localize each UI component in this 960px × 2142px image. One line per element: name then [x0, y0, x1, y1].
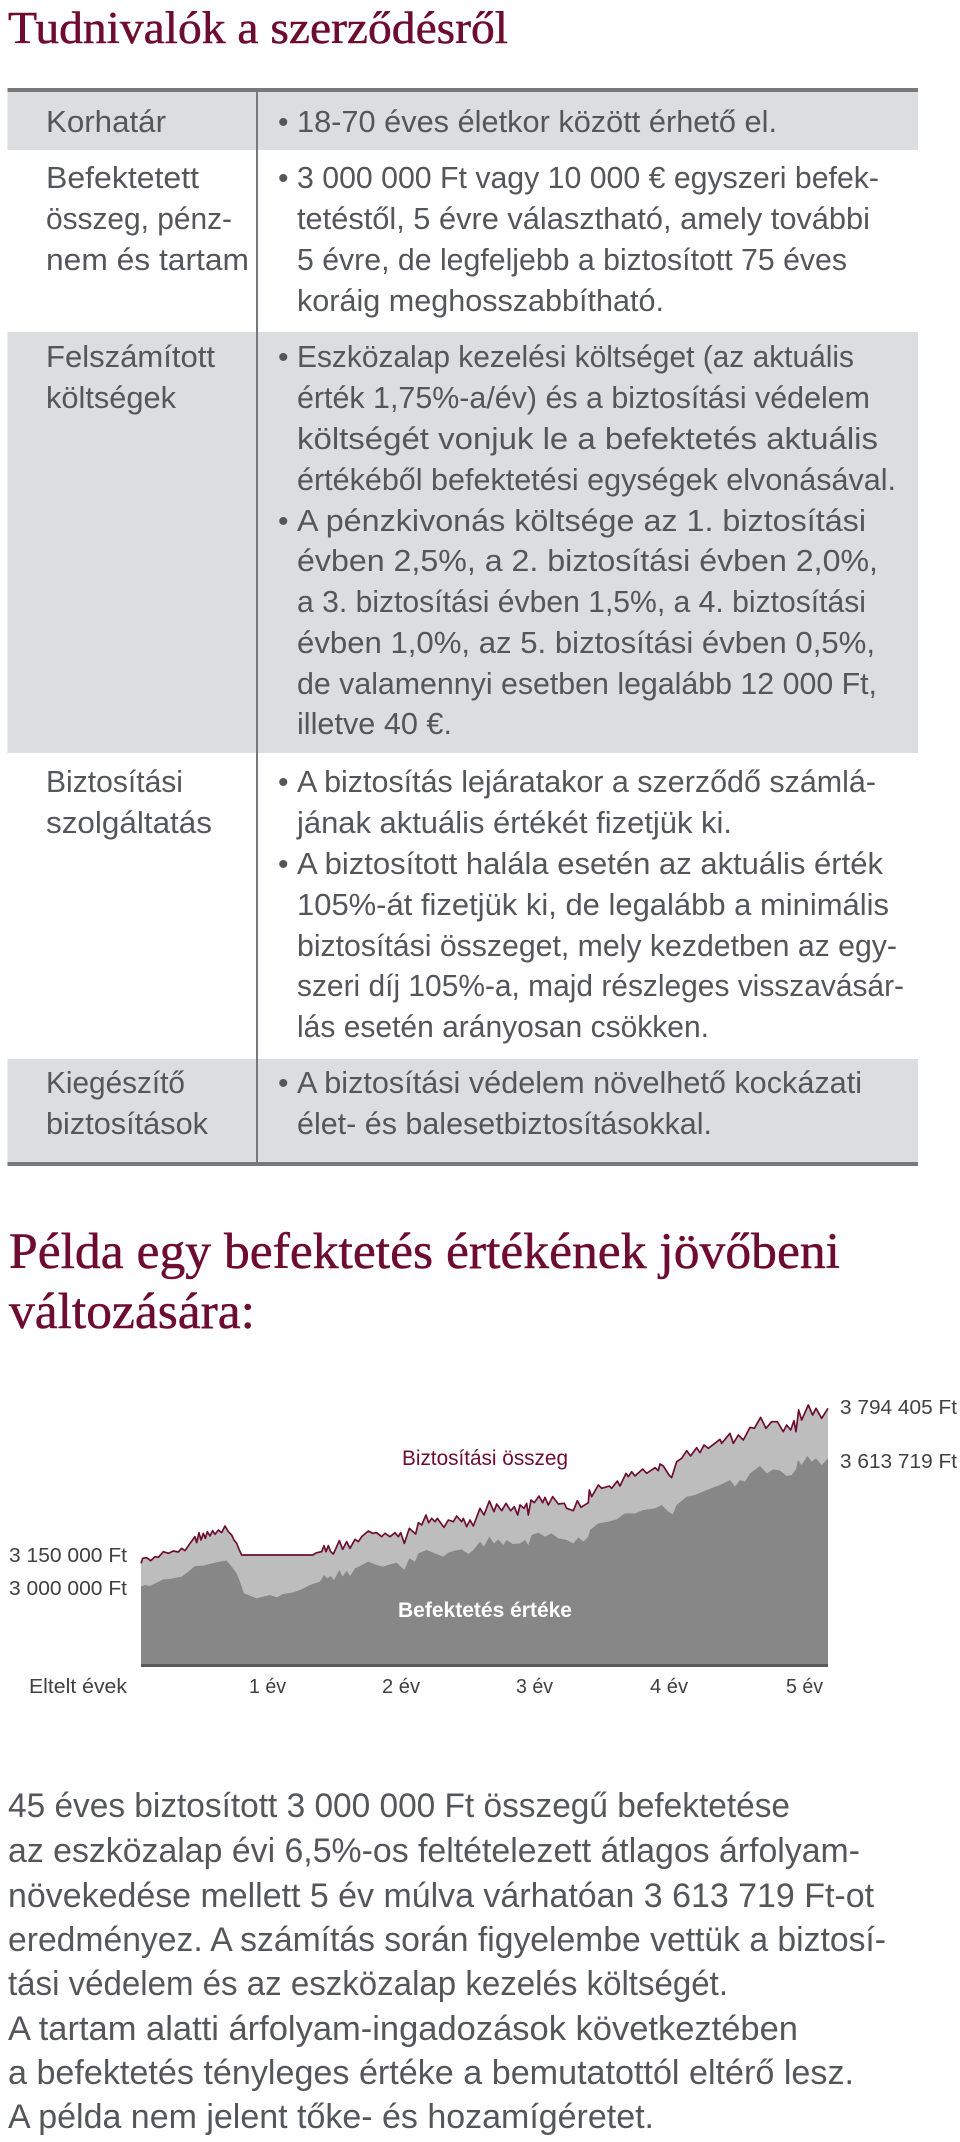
series label: investment value: Befektetés értéke: [398, 1598, 572, 1622]
row: charged costs: értékéből befektetési egységek elvonásával.: [297, 462, 896, 497]
row: age limit: •: [278, 106, 289, 139]
text block: example explanation: A példa nem jelent tőke- és hozamígéretet.: [8, 2098, 654, 2136]
row: supplementary insurance: élet- és balesetbiztosításokkal.: [297, 1106, 712, 1141]
x axis labels: 1 év: [249, 1675, 287, 1698]
row: charged costs: költségek: [46, 380, 176, 415]
row: insurance benefit: •: [278, 848, 289, 881]
row: insurance benefit: •: [278, 766, 289, 799]
x axis labels: 5 év: [786, 1675, 824, 1698]
end values: 3 613 719 Ft: [840, 1450, 957, 1473]
x axis labels: 3 év: [516, 1675, 554, 1698]
start values: 3 150 000 Ft: [9, 1544, 127, 1567]
title: Tudnivalók a szerződésről: Tudnivalók a szerződésről: [8, 3, 508, 53]
row: charged costs: illetve 40 €.: [297, 706, 452, 741]
end values: 3 794 405 Ft: [840, 1396, 957, 1419]
row: insurance benefit: A biztosítás lejáratakor a szerződő számlá-: [297, 764, 876, 799]
heading: example of investment value change: változására:: [9, 1284, 255, 1340]
row: invested amount, currency and term: nem és tartam: [46, 242, 249, 277]
text block: example explanation: eredményez. A számítás során figyelembe vettük a biztosí-: [8, 1921, 886, 1959]
row: charged costs: •: [278, 505, 289, 538]
chart: investment value and insured sum over five years: [9, 1396, 957, 1698]
row: invested amount, currency and term: koráig meghosszabbítható.: [297, 283, 664, 318]
area: insured sum (light grey): [141, 1405, 828, 1665]
row: invested amount, currency and term: tetéstől, 5 évre választható, amely további: [297, 201, 870, 236]
row: insurance benefit: A biztosított halála esetén az aktuális érték: [297, 846, 883, 881]
row: insurance benefit: [46, 764, 904, 1044]
row: supplementary insurance: biztosítások: [46, 1106, 208, 1141]
row: insurance benefit: lás esetén arányosan csökken.: [297, 1009, 709, 1044]
row: age limit: 18-70 éves életkor között érhető el.: [297, 104, 777, 139]
text block: example explanation: a befektetés tényleges értéke a bemutatottól eltérő lesz.: [8, 2054, 854, 2092]
row: insurance benefit: biztosítási összeget, mely kezdetben az egy-: [297, 928, 897, 963]
row: charged costs: Eszközalap kezelési költséget (az aktuális: [297, 339, 854, 374]
text block: example explanation: 45 éves biztosított 3 000 000 Ft összegű befektetése: [8, 1787, 790, 1825]
x axis labels: Eltelt évek: [29, 1675, 128, 1698]
row: insurance benefit: Biztosítási: [46, 764, 183, 799]
x axis labels: 2 év: [382, 1675, 421, 1698]
row: invested amount, currency and term: Befektetett: [46, 160, 199, 195]
row: insurance benefit: jának aktuális értékét fizetjük ki.: [296, 805, 732, 840]
row: charged costs: •: [278, 341, 289, 374]
start values: [9, 1544, 127, 1600]
row: supplementary insurance: •: [278, 1067, 289, 1100]
text block: example explanation: A tartam alatti árfolyam-ingadozások következtében: [8, 2010, 798, 2048]
row: charged costs: [46, 339, 896, 741]
row: invested amount, currency and term: 5 évre, de legfeljebb a biztosított 75 éves: [297, 242, 847, 277]
panel: contract details table: [8, 88, 918, 1166]
end values: [840, 1396, 957, 1473]
row: charged costs: a 3. biztosítási évben 1,5%, a 4. biztosítási: [297, 584, 866, 619]
row: charged costs: költségét vonjuk le a befektetés aktuális: [297, 421, 878, 456]
axis baseline: [141, 1664, 828, 1667]
row: supplementary insurance: A biztosítási védelem növelhető kockázati: [297, 1065, 862, 1100]
row: age limit: Korhatár: [46, 104, 166, 139]
x axis labels: 4 év: [650, 1675, 689, 1698]
start values: 3 000 000 Ft: [9, 1577, 127, 1600]
row: charged costs: de valamennyi esetben legalább 12 000 Ft,: [297, 666, 877, 701]
row: charged costs: évben 1,0%, az 5. biztosítási évben 0,5%,: [297, 625, 875, 660]
row: invested amount, currency and term: •: [278, 162, 289, 195]
row: charged costs: évben 2,5%, a 2. biztosítási évben 2,0%,: [297, 543, 878, 578]
row: charged costs: Felszámított: [46, 339, 215, 374]
x axis labels: [29, 1675, 824, 1698]
text block: example explanation: tási védelem és az eszközalap kezelés költségét.: [8, 1965, 728, 2003]
text block: example explanation: növekedése mellett 5 év múlva várhatóan 3 613 719 Ft-ot: [8, 1877, 875, 1915]
row: invested amount, currency and term: [46, 160, 879, 318]
heading: example of investment value change: [9, 1224, 840, 1340]
row: invested amount, currency and term: 3 000 000 Ft vagy 10 000 € egyszeri befek-: [297, 160, 879, 195]
row: insurance benefit: szeri díj 105%-a, majd részleges visszavásár-: [297, 968, 904, 1003]
text block: example explanation: [8, 1787, 886, 2136]
text block: example explanation: az eszközalap évi 6,5%-os feltételezett átlagos árfolyam-: [8, 1832, 860, 1870]
row: age limit: [46, 104, 777, 139]
row: insurance benefit: szolgáltatás: [46, 805, 212, 840]
line: insured sum: [141, 1405, 828, 1563]
row: insurance benefit: 105%-át fizetjük ki, de legalább a minimális: [297, 887, 889, 922]
heading: example of investment value change: Példa egy befektetés értékének jövőbeni: [9, 1224, 840, 1280]
row: charged costs: A pénzkivonás költsége az 1. biztosítási: [297, 503, 866, 538]
row: invested amount, currency and term: összeg, pénz-: [46, 201, 232, 236]
series label: insured sum: Biztosítási összeg: [402, 1446, 568, 1470]
row: supplementary insurance: [46, 1065, 862, 1141]
row: supplementary insurance: Kiegészítő: [46, 1065, 185, 1100]
area: investment value (dark grey): [141, 1456, 828, 1665]
row: charged costs: érték 1,75%-a/év) és a biztosítási védelem: [297, 380, 870, 415]
